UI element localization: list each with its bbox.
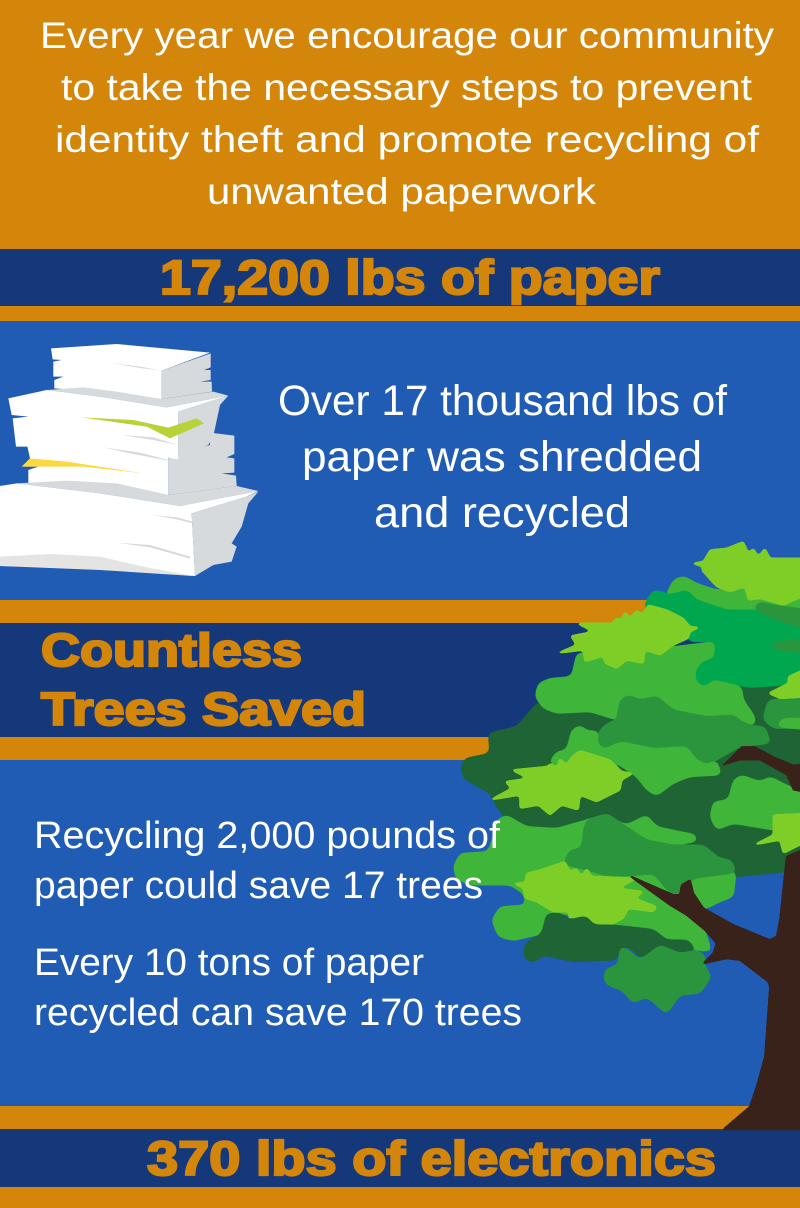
heading: 17,200 lbs of paper: 17,200 lbs of paper (160, 252, 660, 305)
tree facts text: paper could save 17 trees (34, 865, 483, 907)
paper text: Over 17 thousand lbs of (278, 377, 728, 425)
paper text: paper was shredded (302, 433, 702, 481)
heading: 370 lbs of electronics: 370 lbs of electronics (147, 1133, 716, 1186)
intro text (40, 15, 775, 212)
illustration: tree (453, 542, 800, 1129)
intro text: to take the necessary steps to prevent (61, 67, 753, 108)
icon: stack of paper (0, 344, 258, 576)
tree facts text: Recycling 2,000 pounds of (34, 815, 500, 857)
intro text: identity theft and promote recycling of (55, 119, 760, 160)
paper text: and recycled (374, 489, 630, 537)
intro text: Every year we encourage our community (40, 15, 775, 56)
intro text: unwanted paperwork (207, 171, 597, 212)
paper text (278, 377, 728, 537)
heading: Countless Trees Saved: Trees Saved (41, 683, 366, 735)
tree facts text (34, 815, 522, 1034)
tree facts text: Every 10 tons of paper (34, 942, 424, 984)
heading: Countless Trees Saved: Countless (41, 624, 302, 676)
tree facts text: recycled can save 170 trees (34, 992, 522, 1034)
heading: Countless Trees Saved (41, 624, 366, 735)
